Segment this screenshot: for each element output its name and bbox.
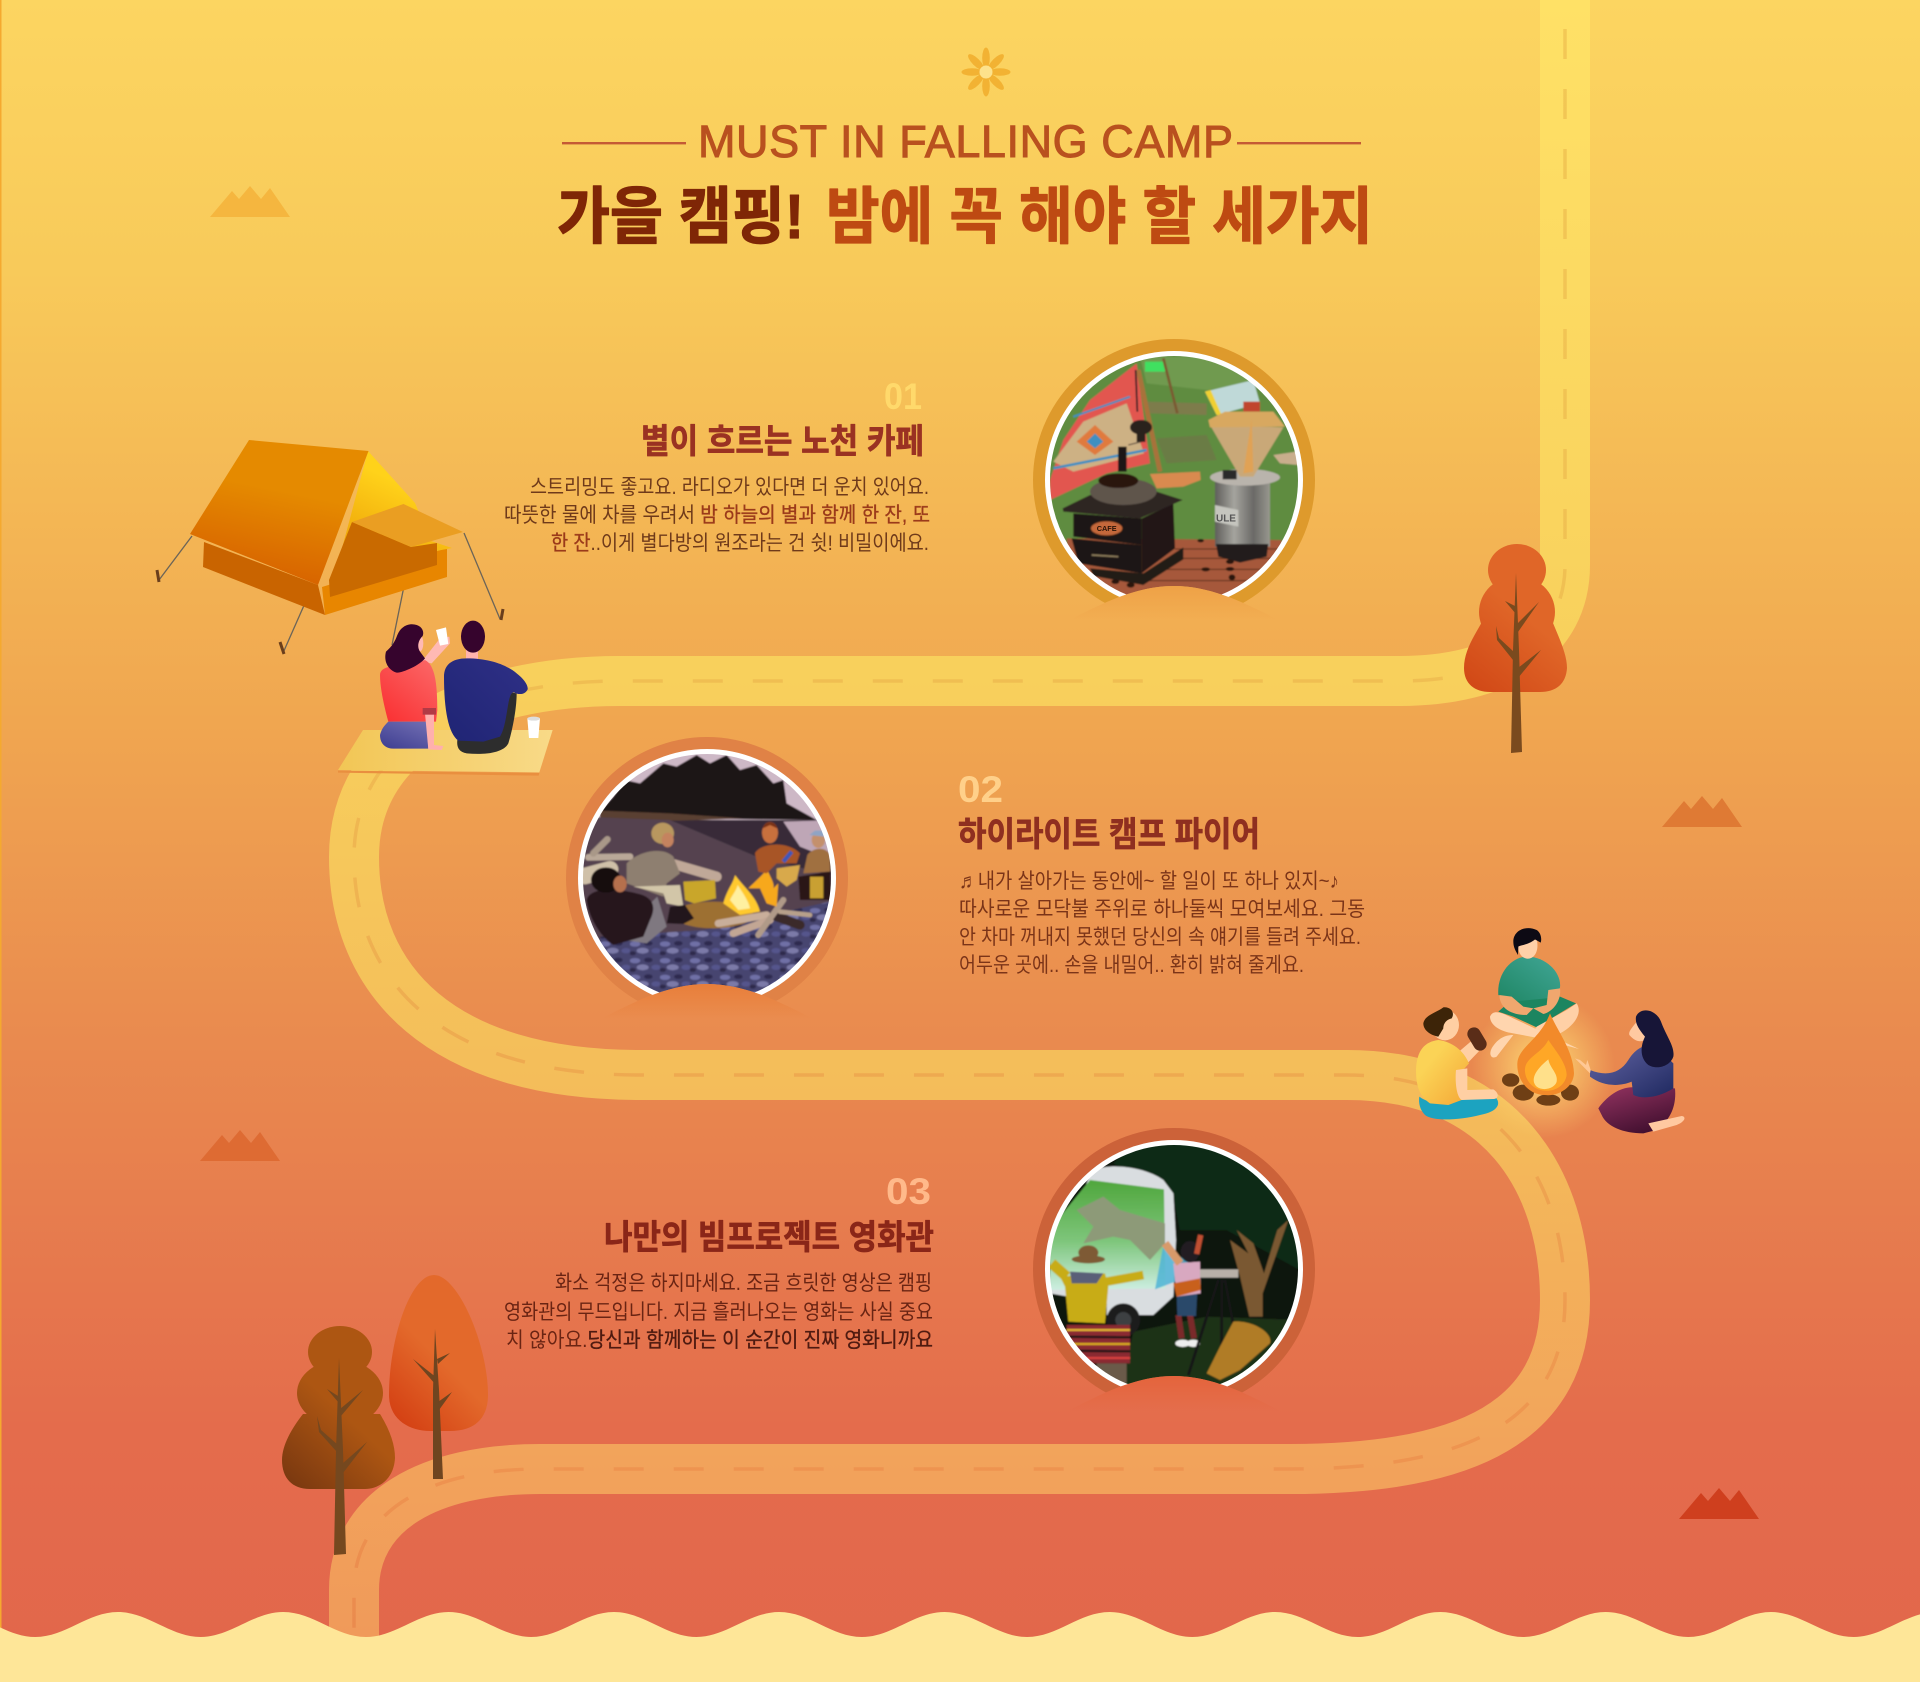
woman [380,624,450,750]
heading: 하이라이트 캠프 파이어 [958,816,1260,854]
winding road [354,0,1565,1645]
korean title orange part: 밤에 꼭 해야 할 세가지 [826,183,1373,252]
label: cafe: CAFE [1097,524,1117,533]
body text: 따사로운 모닥불 주위로 하나둘씩 모여보세요. 그동 [959,898,1365,921]
korean title dark part: 가을 캠핑! [557,183,804,252]
heading: 나만의 빔프로젝트 영화관 [604,1219,934,1257]
number 01: 01 [884,376,922,417]
photo 1: coffee grinder [1033,339,1315,630]
icon: flower [962,48,1010,96]
mound [583,984,831,1028]
number 02: 02 [958,769,1003,810]
photo 2: beach campfire [566,737,848,1028]
person: top [1490,928,1579,1057]
body text: 한 잔..이게 별다방의 원조라는 건 쉿! 비밀이에요. [551,532,929,555]
mound [1050,586,1298,630]
tent illustration [157,440,503,654]
body text: 스트리밍도 좋고요. 라디오가 있다면 더 운치 있어요. [530,476,929,499]
mountain icon 3 [200,1130,280,1161]
body text: 영화관의 무드입니다. 지금 흘러나오는 영화는 사실 중요 [504,1301,933,1324]
couple on a mat [338,621,553,776]
body text [504,1272,933,1352]
body text [504,476,930,555]
body text: 화소 걱정은 하지마세요. 조금 흐릿한 영상은 캠핑 [555,1272,932,1295]
mountain icon 4 [1679,1488,1759,1519]
heading: 별이 흐르는 노천 카페 [641,423,924,461]
mountain icon 2 [1662,796,1742,827]
campfire group [1416,928,1684,1138]
body text: 어두운 곳에.. 손을 내밀어.. 환히 밝혀 줄게요. [959,954,1304,977]
campfire [1502,1013,1579,1106]
body text [959,870,1365,977]
mound [1050,1376,1298,1420]
man [444,621,528,754]
photo 3: van projection [1033,1128,1315,1420]
tree: orange by the road [1464,544,1567,753]
person: right [1575,1010,1684,1133]
label: thermos: ULE [1216,514,1236,525]
body text: 안 차마 꺼내지 못했던 당신의 속 얘기를 들려 주세요. [959,926,1361,949]
mountain icon 1 [210,186,290,217]
body text: ♬내가 살아가는 동안에~ 할 일이 또 하나 있지~♪ [959,870,1339,893]
title block [557,116,1373,252]
section 2: highlight campfire [958,769,1365,977]
body text: 치 않아요.당신과 함께하는 이 순간이 진짜 영화니까요 [506,1329,933,1352]
number 03: 03 [886,1171,931,1212]
section 1: starry open-air cafe [504,376,930,555]
person: left [1416,1007,1498,1119]
fire glow [1472,995,1615,1138]
cup [527,717,540,738]
trees: brown and orange [282,1275,488,1555]
english title: MUST IN FALLING CAMP [698,116,1233,167]
section 3: beam projector cinema [504,1171,934,1352]
body text: 따뜻한 물에 차를 우려서 밤 하늘의 별과 함께 한 잔, 또 [504,504,930,527]
bottom wave [0,1612,1920,1682]
